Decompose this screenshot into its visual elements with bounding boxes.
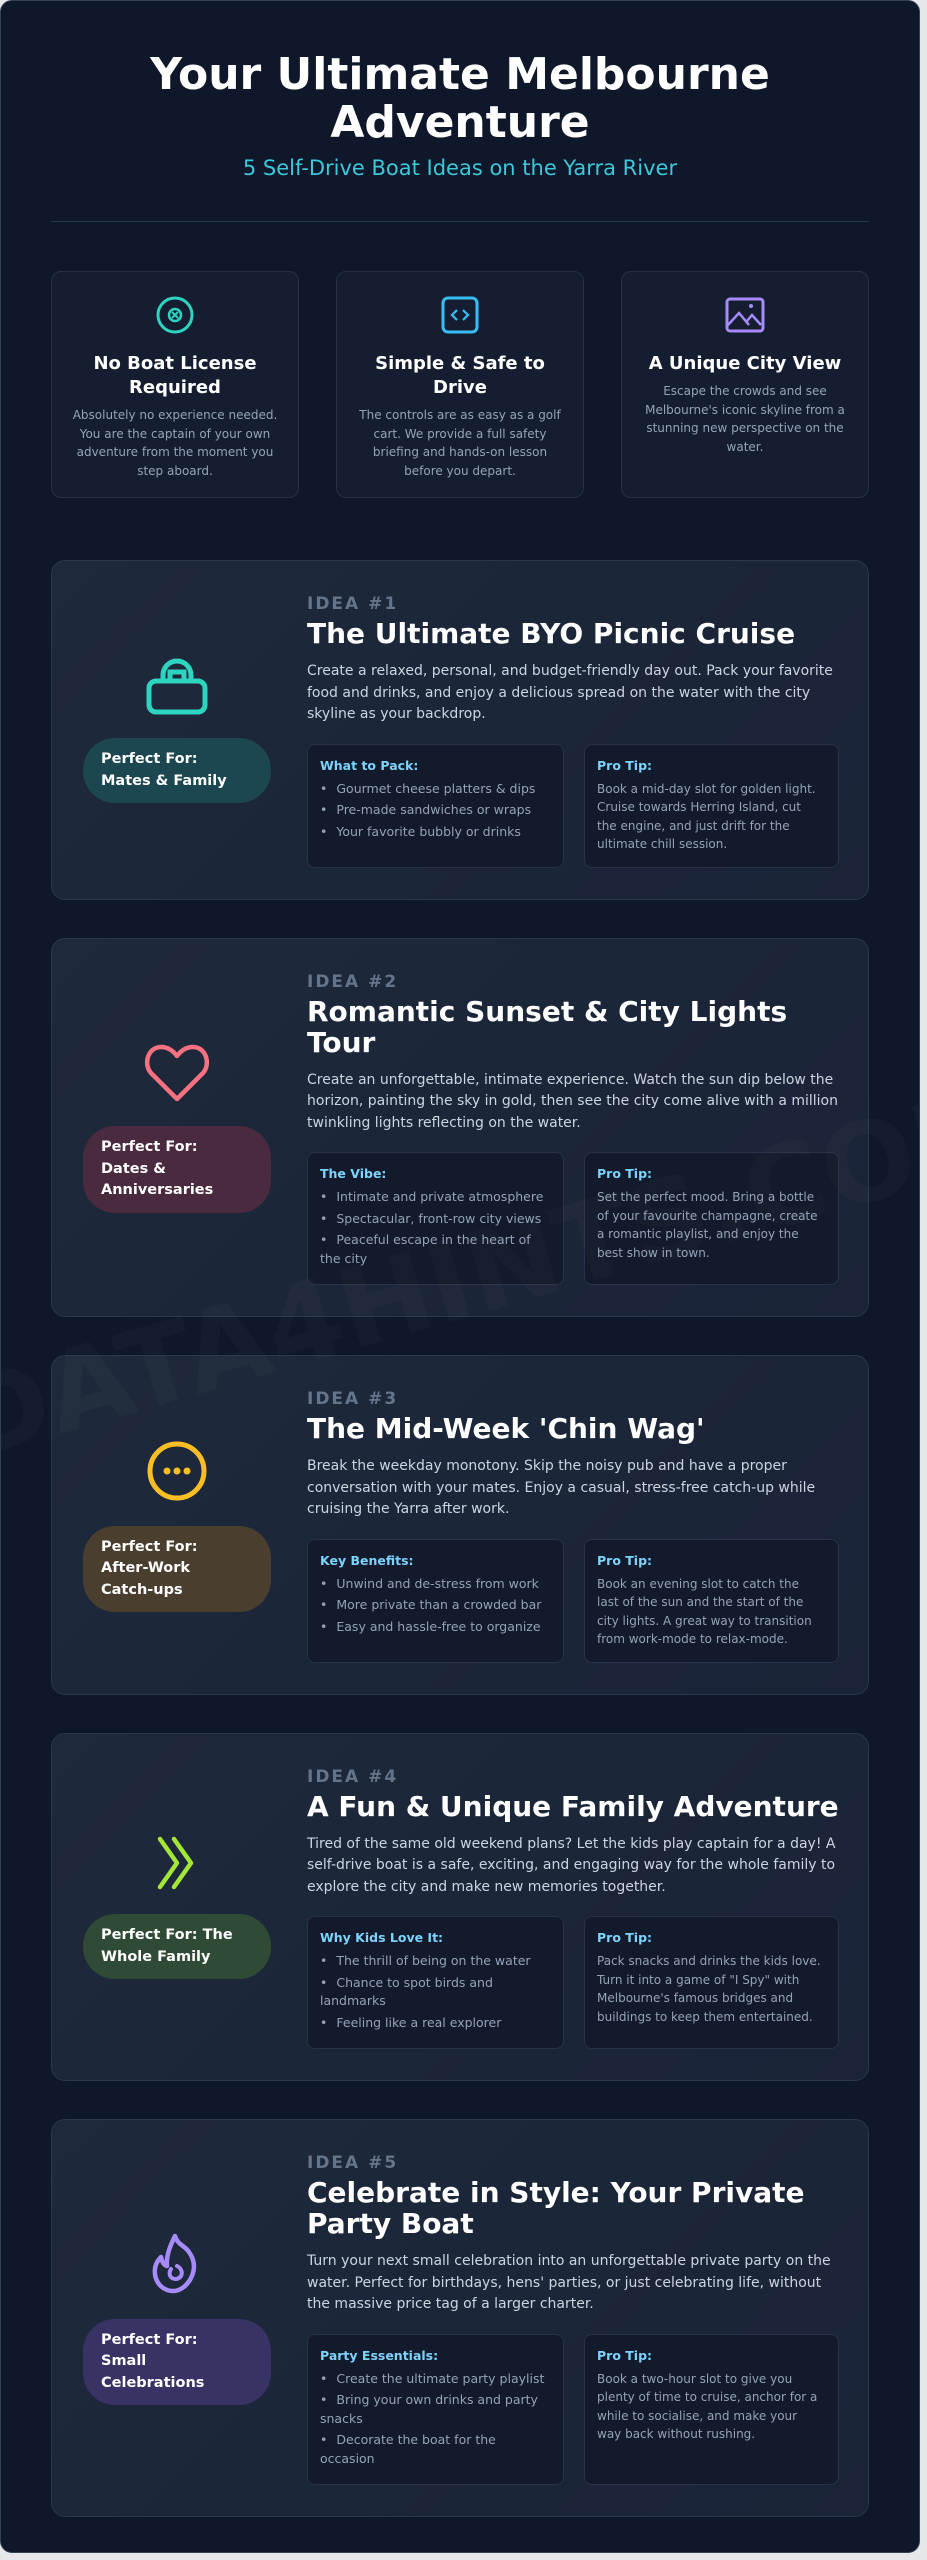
box: pro tip: Pro Tip: (597, 2348, 652, 2362)
box: what to pack: • Pre-made sandwiches or wraps (320, 802, 531, 817)
icon: image (726, 298, 764, 332)
title: Adventure (330, 97, 590, 148)
panel: idea 3 (51, 1355, 869, 1694)
panel: idea 4: A Fun & Unique Family Adventure (307, 1790, 839, 1822)
box: party essentials: Party Essentials: (320, 2348, 438, 2362)
panel: idea 1 (51, 560, 869, 900)
panel: simple and safe: The controls are as easy as a golf cart. We provide a full safety briefing and hands-on lesson before you depart. (359, 408, 561, 478)
panel: idea 2: Create an unforgettable, intimate experience. Watch the sun dip below the horizon, painting the sky in gold, then see the city come alive with a million twinkling lights reflecting on the water. (307, 1072, 838, 1130)
box: pro tip: Pack snacks and drinks the kids love. Turn it into a game of "I Spy" with Melbourne's famous bridges and buildings to keep them entertained. (597, 1954, 821, 2024)
feature cards row (51, 271, 869, 498)
box: pro tip: Pro Tip: (597, 1166, 652, 1181)
pill: perfect for: Perfect For: Small Celebrations (101, 2332, 204, 2391)
panel: idea 4 (51, 1732, 869, 2081)
pill: perfect for (83, 2319, 271, 2405)
panel: idea 4: Tired of the same old weekend plans? Let the kids play captain for a day! A self-drive boat is a safe, exciting, and engaging way for the whole family to explore the city and make new memories together. (307, 1836, 835, 1894)
box: what to pack: What to Pack: (320, 758, 418, 772)
box: the vibe: • Spectacular, front-row city views (320, 1210, 541, 1226)
panel: idea 5: IDEA #5 (307, 2153, 398, 2173)
icon: flame (152, 2234, 196, 2294)
box: why kids love it (307, 1916, 564, 2049)
panel: no boat license: No Boat License Required (93, 353, 257, 398)
icon: wheel (156, 296, 194, 334)
panel: idea 5: Celebrate in Style: Your Private Party Boat (307, 2176, 804, 2240)
box: party essentials: • Decorate the boat for the occasion (320, 2432, 496, 2466)
subtitle: 5 Self-Drive Boat Ideas on the Yarra River (243, 156, 677, 180)
box: pro tip (584, 1916, 839, 2049)
icon: chat dots (148, 1442, 206, 1500)
pill: perfect for: Perfect For: Mates & Family (101, 751, 227, 789)
panel: idea 3: Break the weekday monotony. Skip the noisy pub and have a proper conversation with your mates. Enjoy a casual, stress-free catch-up while cruising the Yarra after work. (307, 1458, 815, 1517)
panel: idea 5: Turn your next small celebration into an unforgettable private party on the water. Perfect for birthdays, hens' parties, or just celebrating life, without the massive price tag of a larger charter. (307, 2253, 831, 2312)
box: what to pack (307, 744, 564, 868)
box: the vibe: • Peaceful escape in the heart of the city (320, 1232, 531, 1266)
pill: perfect for (83, 1914, 271, 1979)
panel: idea 1: Create a relaxed, personal, and budget-friendly day out. Pack your favorite food and drinks, and enjoy a delicious spread on the water with the city skyline as your backdrop. (307, 663, 833, 722)
box: pro tip: Pro Tip: (597, 1930, 652, 1945)
box: key benefits: • Unwind and de-stress from work (320, 1576, 539, 1590)
box: pro tip (584, 1538, 839, 1662)
panel: idea 4: IDEA #4 (307, 1766, 398, 1786)
panel: no boat license: Absolutely no experience needed. You are the captain of your own adventure from the moment you step aboard. (73, 408, 277, 478)
box: pro tip: Book a mid-day slot for golden light. Cruise towards Herring Island, cut the engine, and just drift for the ultimate chill session. (597, 782, 816, 851)
box: party essentials: • Create the ultimate party playlist (320, 2370, 544, 2386)
box: the vibe: • Intimate and private atmosphere (320, 1189, 543, 1204)
pill: perfect for: Perfect For: After-Work Catch-ups (101, 1538, 198, 1598)
panel: idea 1: The Ultimate BYO Picnic Cruise (307, 617, 795, 650)
box: pro tip (584, 744, 839, 868)
box: why kids love it: • Chance to spot birds and landmarks (320, 1974, 493, 2008)
panel: no boat license (51, 271, 299, 498)
panel: idea 2 (51, 938, 869, 1317)
pill: perfect for: Perfect For: Dates & Anniversaries (101, 1139, 213, 1198)
box: why kids love it: • Feeling like a real explorer (320, 2014, 501, 2030)
box: the vibe (307, 1152, 564, 1285)
box: key benefits: • Easy and hassle-free to organize (320, 1618, 541, 1634)
icon: double chevron (158, 1836, 194, 1890)
icon: heart (144, 1044, 210, 1102)
box: why kids love it: Why Kids Love It: (320, 1930, 443, 1945)
box: party essentials: • Bring your own drinks and party snacks (320, 2392, 538, 2426)
box: pro tip: Pro Tip: (597, 758, 652, 772)
panel: idea 5 (51, 2119, 869, 2517)
title: Your Ultimate Melbourne (150, 49, 770, 100)
title (150, 49, 770, 148)
box: pro tip: Set the perfect mood. Bring a bottle of your favourite champagne, create a romantic playlist, and enjoy the best show in town. (597, 1190, 818, 1260)
box: what to pack: • Your favorite bubbly or drinks (320, 824, 521, 838)
panel: idea 2: IDEA #2 (307, 972, 398, 992)
box: pro tip (584, 2334, 839, 2485)
pill: perfect for: Perfect For: The Whole Family (101, 1927, 233, 1965)
panel: simple and safe (336, 271, 584, 498)
box: party essentials (307, 2334, 564, 2485)
panel: unique city view (621, 271, 869, 498)
panel: unique city view: A Unique City View (649, 353, 841, 374)
box: pro tip (584, 1152, 839, 1285)
pill: perfect for (83, 1526, 271, 1612)
icon: bag (146, 658, 208, 714)
box: key benefits: • More private than a crowded bar (320, 1597, 541, 1612)
panel: idea 2: Romantic Sunset & City Lights Tour (307, 994, 787, 1058)
box: key benefits (307, 1538, 564, 1662)
box: pro tip: Book a two-hour slot to give you plenty of time to cruise, anchor for a while to socialise, and make your way back without rushing. (597, 2372, 817, 2441)
box: pro tip: Book an evening slot to catch the last of the sun and the start of the city lights. A great way to transition from work-mode to relax-mode. (597, 1576, 812, 1646)
pill: perfect for (83, 738, 271, 803)
box: what to pack: • Gourmet cheese platters & dips (320, 780, 535, 796)
icon: control box (442, 296, 478, 334)
panel: simple and safe: Simple & Safe to Drive (375, 353, 545, 398)
pill: perfect for (83, 1126, 271, 1212)
box: why kids love it: • The thrill of being on the water (320, 1953, 531, 1968)
panel: idea 1: IDEA #1 (307, 594, 398, 614)
panel: unique city view: Escape the crowds and see Melbourne's iconic skyline from a stunning new perspective on the water. (645, 384, 845, 454)
panel: idea 3: IDEA #3 (307, 1389, 398, 1409)
box: the vibe: The Vibe: (320, 1166, 386, 1181)
box: pro tip: Pro Tip: (597, 1552, 652, 1568)
panel: idea 3: The Mid-Week 'Chin Wag' (307, 1412, 705, 1445)
box: key benefits: Key Benefits: (320, 1552, 414, 1568)
